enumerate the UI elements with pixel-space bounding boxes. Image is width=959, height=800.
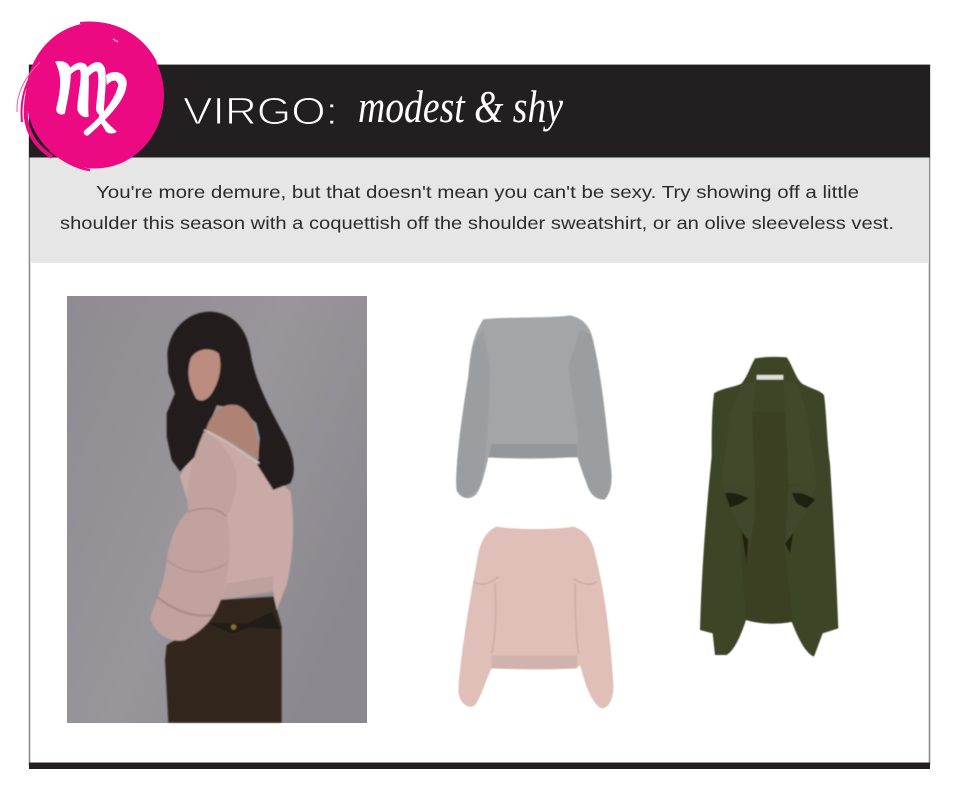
vest neck label [757,375,783,380]
panel: description band [30,158,929,263]
shoulder [206,405,259,459]
product: grey sweater [456,315,612,499]
title: VIRGO: VIRGO: [183,91,338,133]
bottom bar [29,762,930,769]
panel: title bar [29,65,930,158]
hair [167,312,294,490]
photo: model in off-shoulder sweater [67,296,367,723]
icon: virgo symbol [55,61,127,136]
trousers [165,597,282,723]
product: pink sweater [458,527,613,708]
vest lapel folds [722,380,757,485]
neckline trim [204,430,259,463]
text block: description: shoulder this season with a coquettish off the shoulder sweatshirt, or an olive sleeveless vest. [60,213,894,233]
face [188,349,220,400]
icon: pink brush circle with virgo symbol [17,22,164,170]
product: olive sleeveless vest [700,357,838,657]
title: modest and shy script: modest & shy [358,81,563,132]
sleeve [150,432,237,641]
vest inner back [740,412,793,624]
sweater body [180,430,293,610]
text block: description: You're more demure, but that doesn't mean you can't be sexy. Try showing off a little [96,182,859,202]
text block: description [60,182,894,233]
